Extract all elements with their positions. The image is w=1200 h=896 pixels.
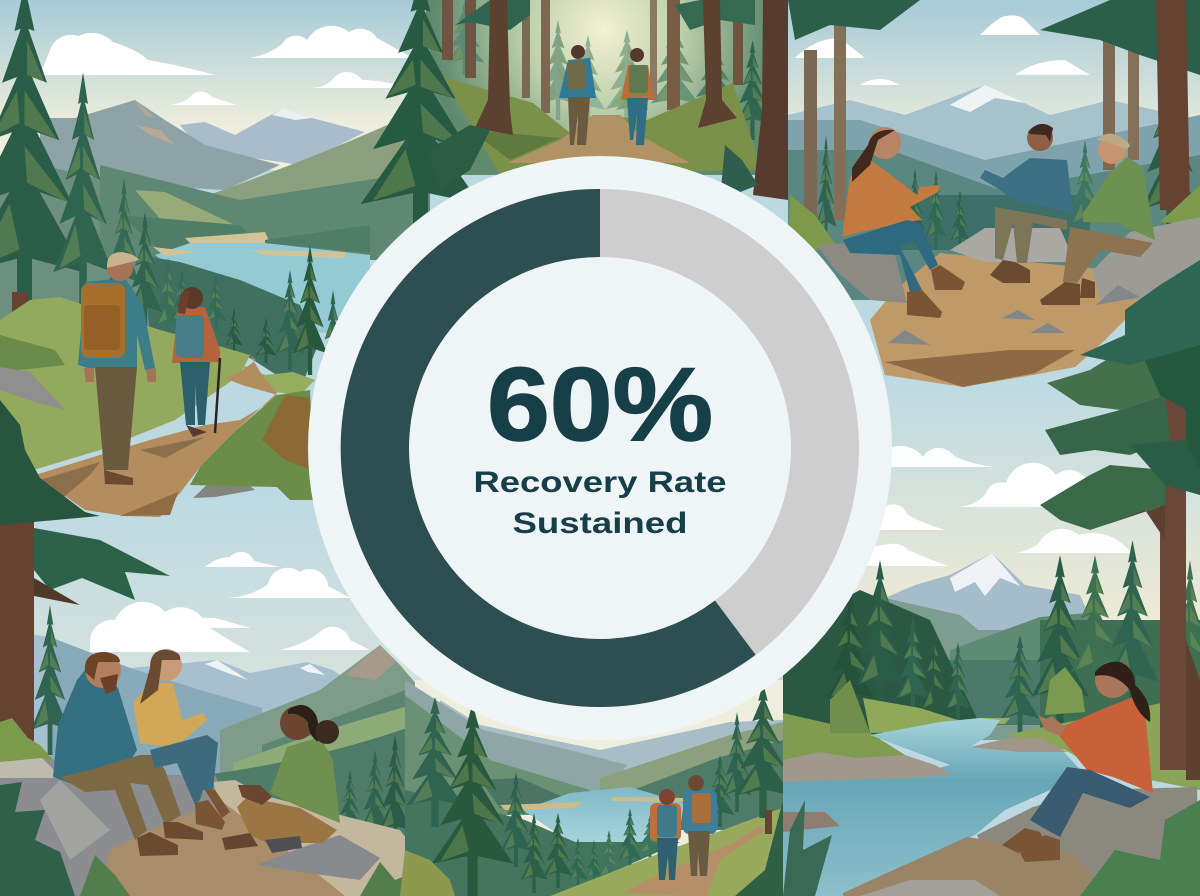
meadows — [863, 698, 980, 733]
rocks — [817, 243, 907, 303]
donut remainder 40% — [375, 223, 825, 673]
clouds — [90, 552, 370, 652]
person: woman in yellow jacket — [133, 649, 230, 830]
clouds — [795, 15, 1090, 85]
fern foreground — [1080, 260, 1200, 365]
clouds — [860, 446, 1133, 566]
person: female hiker with trekking pole — [172, 287, 220, 437]
panel: upper-right scene, friends talking in the forest — [788, 0, 1200, 387]
rocks — [0, 367, 65, 410]
person: man in blue hoodie — [53, 652, 203, 856]
dark forest left — [783, 590, 980, 760]
chart: 60% donut badge — [308, 156, 892, 740]
lake — [155, 243, 370, 340]
bushes — [830, 680, 870, 733]
shrub — [0, 718, 55, 770]
shore rocks — [783, 752, 953, 782]
forest — [405, 790, 680, 896]
right pines — [706, 755, 734, 827]
thin trunks — [804, 50, 817, 220]
grassy slope — [550, 808, 782, 896]
panel: upper-left scene, hikers on a trail — [0, 0, 430, 525]
panel: bottom-left scene, friends talking on a rock — [0, 490, 440, 896]
grass fronds — [735, 800, 783, 896]
lake shores — [500, 797, 686, 810]
person: woman in orange hoodie — [1002, 662, 1153, 862]
lake — [523, 787, 684, 845]
caption line one: Recovery Rate — [474, 466, 726, 499]
distant mountains — [440, 700, 783, 800]
panel: bottom-centre scene, hikers walking towards a lake — [400, 680, 792, 896]
forest floor — [443, 77, 762, 175]
conifers on the left — [0, 0, 84, 330]
person: male hiker with backpack — [78, 252, 156, 485]
fern foreground — [0, 782, 75, 896]
mountains — [180, 108, 365, 165]
snow mountain — [885, 553, 1100, 640]
caption line two: Sustained — [512, 507, 688, 540]
panel: top-centre scene, hikers in sunlit forest — [360, 0, 790, 250]
left pine tree — [0, 515, 170, 755]
rock seat — [977, 787, 1200, 896]
fern foreground — [1080, 800, 1200, 896]
hiker in blue jacket — [559, 45, 596, 145]
forest band below the lake — [140, 255, 318, 390]
foreground ferns — [0, 400, 100, 525]
misty pines — [541, 20, 575, 120]
dirt trail — [35, 355, 278, 517]
bushes — [190, 390, 315, 500]
lake shores — [153, 232, 345, 258]
right rock — [213, 780, 430, 896]
hiker with blue jacket — [683, 775, 717, 876]
plants right — [720, 145, 758, 200]
person: man in green hoodie — [1040, 134, 1155, 305]
big trunks — [475, 0, 513, 135]
mountains — [788, 85, 1200, 260]
clouds — [40, 26, 413, 105]
hillside — [0, 297, 250, 480]
mountains — [0, 630, 360, 800]
rock seat — [0, 758, 245, 896]
hiker with orange jacket — [650, 789, 681, 880]
badge background — [308, 156, 892, 740]
lake — [783, 718, 1085, 896]
bush at left edge — [400, 850, 455, 896]
branches at the top — [455, 0, 530, 30]
thin trunks — [442, 0, 453, 60]
donut value 60% — [341, 189, 756, 707]
person: woman in orange fleece — [842, 127, 965, 318]
dirt path — [623, 827, 768, 896]
pine left — [360, 0, 480, 250]
big trunk right — [1156, 0, 1190, 210]
person: man in blue fleece — [980, 124, 1073, 283]
bushes — [788, 195, 838, 250]
big number: 60% — [487, 347, 713, 463]
ground — [870, 253, 1150, 387]
hiker in orange jacket — [621, 48, 654, 145]
tall pine with trunk — [1040, 310, 1200, 780]
person: woman in green hoodie — [222, 705, 340, 853]
ground — [100, 800, 345, 896]
canopy — [788, 0, 920, 40]
panel: lower-right scene, woman by the lake — [783, 310, 1200, 896]
